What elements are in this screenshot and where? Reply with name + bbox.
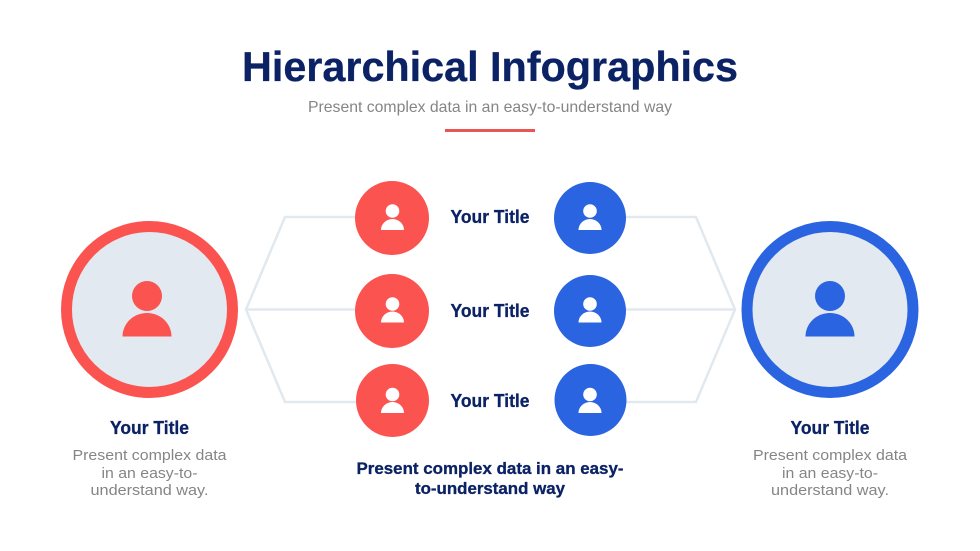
center description: Present complex data in an easy- <box>356 459 624 478</box>
right description: Present complex data <box>753 447 908 464</box>
subtitle: Present complex data in an easy-to-understand way <box>308 99 672 116</box>
row 2: title: Your Title <box>450 301 530 321</box>
left title: Your Title <box>110 418 189 438</box>
right description: in an easy-to- <box>782 465 878 482</box>
title: Hierarchical Infographics <box>242 43 738 90</box>
center description <box>356 459 624 498</box>
left description: Present complex data <box>72 447 227 464</box>
row 2: blue icon <box>554 275 626 347</box>
right title: Your Title <box>790 418 870 438</box>
left connector lines <box>246 217 356 402</box>
title underline <box>445 129 535 132</box>
row 3: blue icon <box>554 364 626 436</box>
right connector lines <box>625 217 735 402</box>
right description: understand way. <box>771 482 889 499</box>
center description: to-understand way <box>415 479 566 498</box>
right description <box>753 447 908 499</box>
row 1: red icon <box>355 181 429 255</box>
left description <box>72 447 227 499</box>
row 2: red icon <box>355 274 429 348</box>
row 3: title: Your Title <box>450 391 530 411</box>
left description: in an easy-to- <box>102 465 198 482</box>
row 3: red icon <box>356 364 429 437</box>
row 1: title: Your Title <box>450 207 530 227</box>
left description: understand way. <box>90 482 208 499</box>
left large circle with person icon <box>66 226 232 392</box>
right large circle with person icon <box>747 226 913 392</box>
row 1: blue icon <box>554 182 626 254</box>
